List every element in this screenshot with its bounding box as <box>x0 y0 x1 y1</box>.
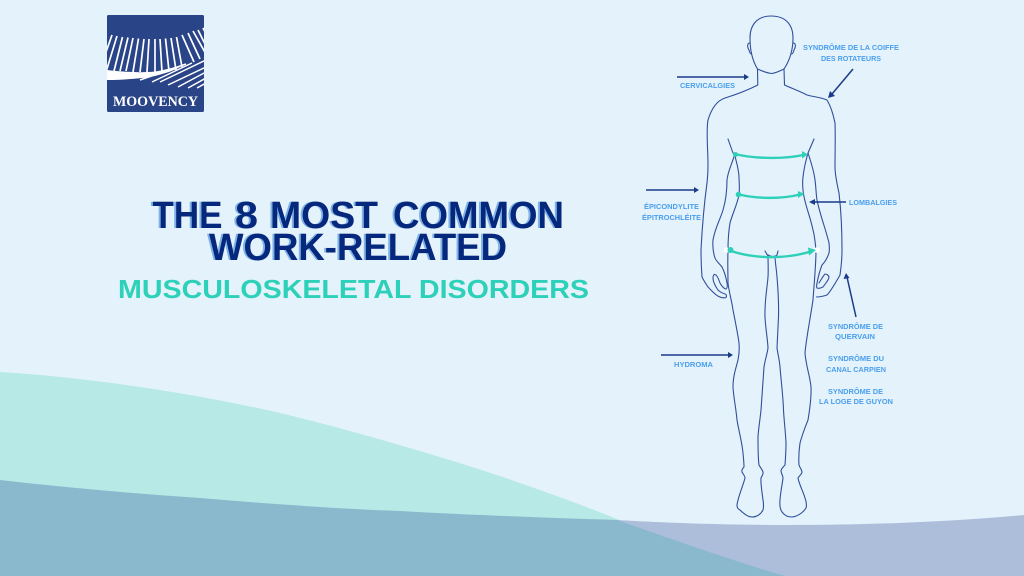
logo wordmark: MOOVENCY <box>113 94 198 110</box>
cyan arrow: waist <box>736 191 804 198</box>
label: syndrome de la coiffe des rotateurs with arrow: SYNDRÔME DE LA COIFFE <box>803 43 899 52</box>
label: wrist syndromes with arrow: SYNDRÔME DE <box>828 322 883 331</box>
label: hydroma with arrow: HYDROMA <box>674 360 714 369</box>
label: lombalgies with arrow: LOMBALGIES <box>849 198 897 207</box>
label: syndrome de la coiffe des rotateurs with arrow <box>803 43 899 98</box>
title <box>118 195 589 304</box>
title line 1: 8 <box>235 195 258 237</box>
cyan arrow: hips <box>724 247 820 257</box>
label: wrist syndromes with arrow: CANAL CARPIEN <box>826 365 886 374</box>
title line 1: THE <box>152 195 222 237</box>
body outline figure <box>701 16 842 517</box>
label: wrist syndromes with arrow: LA LOGE DE GUYON <box>819 397 893 406</box>
label: cervicalgies with arrow <box>677 74 749 90</box>
label: lombalgies with arrow <box>809 198 897 207</box>
label: wrist syndromes with arrow: SYNDRÔME DE <box>828 387 883 396</box>
title line 1 <box>152 195 564 237</box>
label: wrist syndromes with arrow: SYNDRÔME DU <box>828 354 884 363</box>
label: hydroma with arrow <box>661 352 733 369</box>
label: syndrome de la coiffe des rotateurs with arrow: DES ROTATEURS <box>821 54 881 63</box>
logo: Moovency <box>106 15 207 112</box>
label: epicondylite and epitrochleite with arrow: ÉPITROCHLÉITE <box>642 213 701 222</box>
cyan arrow: chest <box>733 151 808 158</box>
label: epicondylite and epitrochleite with arrow: ÉPICONDYLITE <box>644 202 699 211</box>
title line 1: COMMON <box>393 195 564 237</box>
title line 1: MOST <box>270 195 378 237</box>
label: cervicalgies with arrow: CERVICALGIES <box>680 81 735 90</box>
title line 2: WORK-RELATED <box>209 227 507 269</box>
label: epicondylite and epitrochleite with arrow <box>642 187 701 222</box>
label: wrist syndromes with arrow <box>819 273 893 406</box>
subtitle: MUSCULOSKELETAL DISORDERS <box>118 276 589 304</box>
label: wrist syndromes with arrow: QUERVAIN <box>835 332 875 341</box>
background waves <box>0 372 1024 576</box>
